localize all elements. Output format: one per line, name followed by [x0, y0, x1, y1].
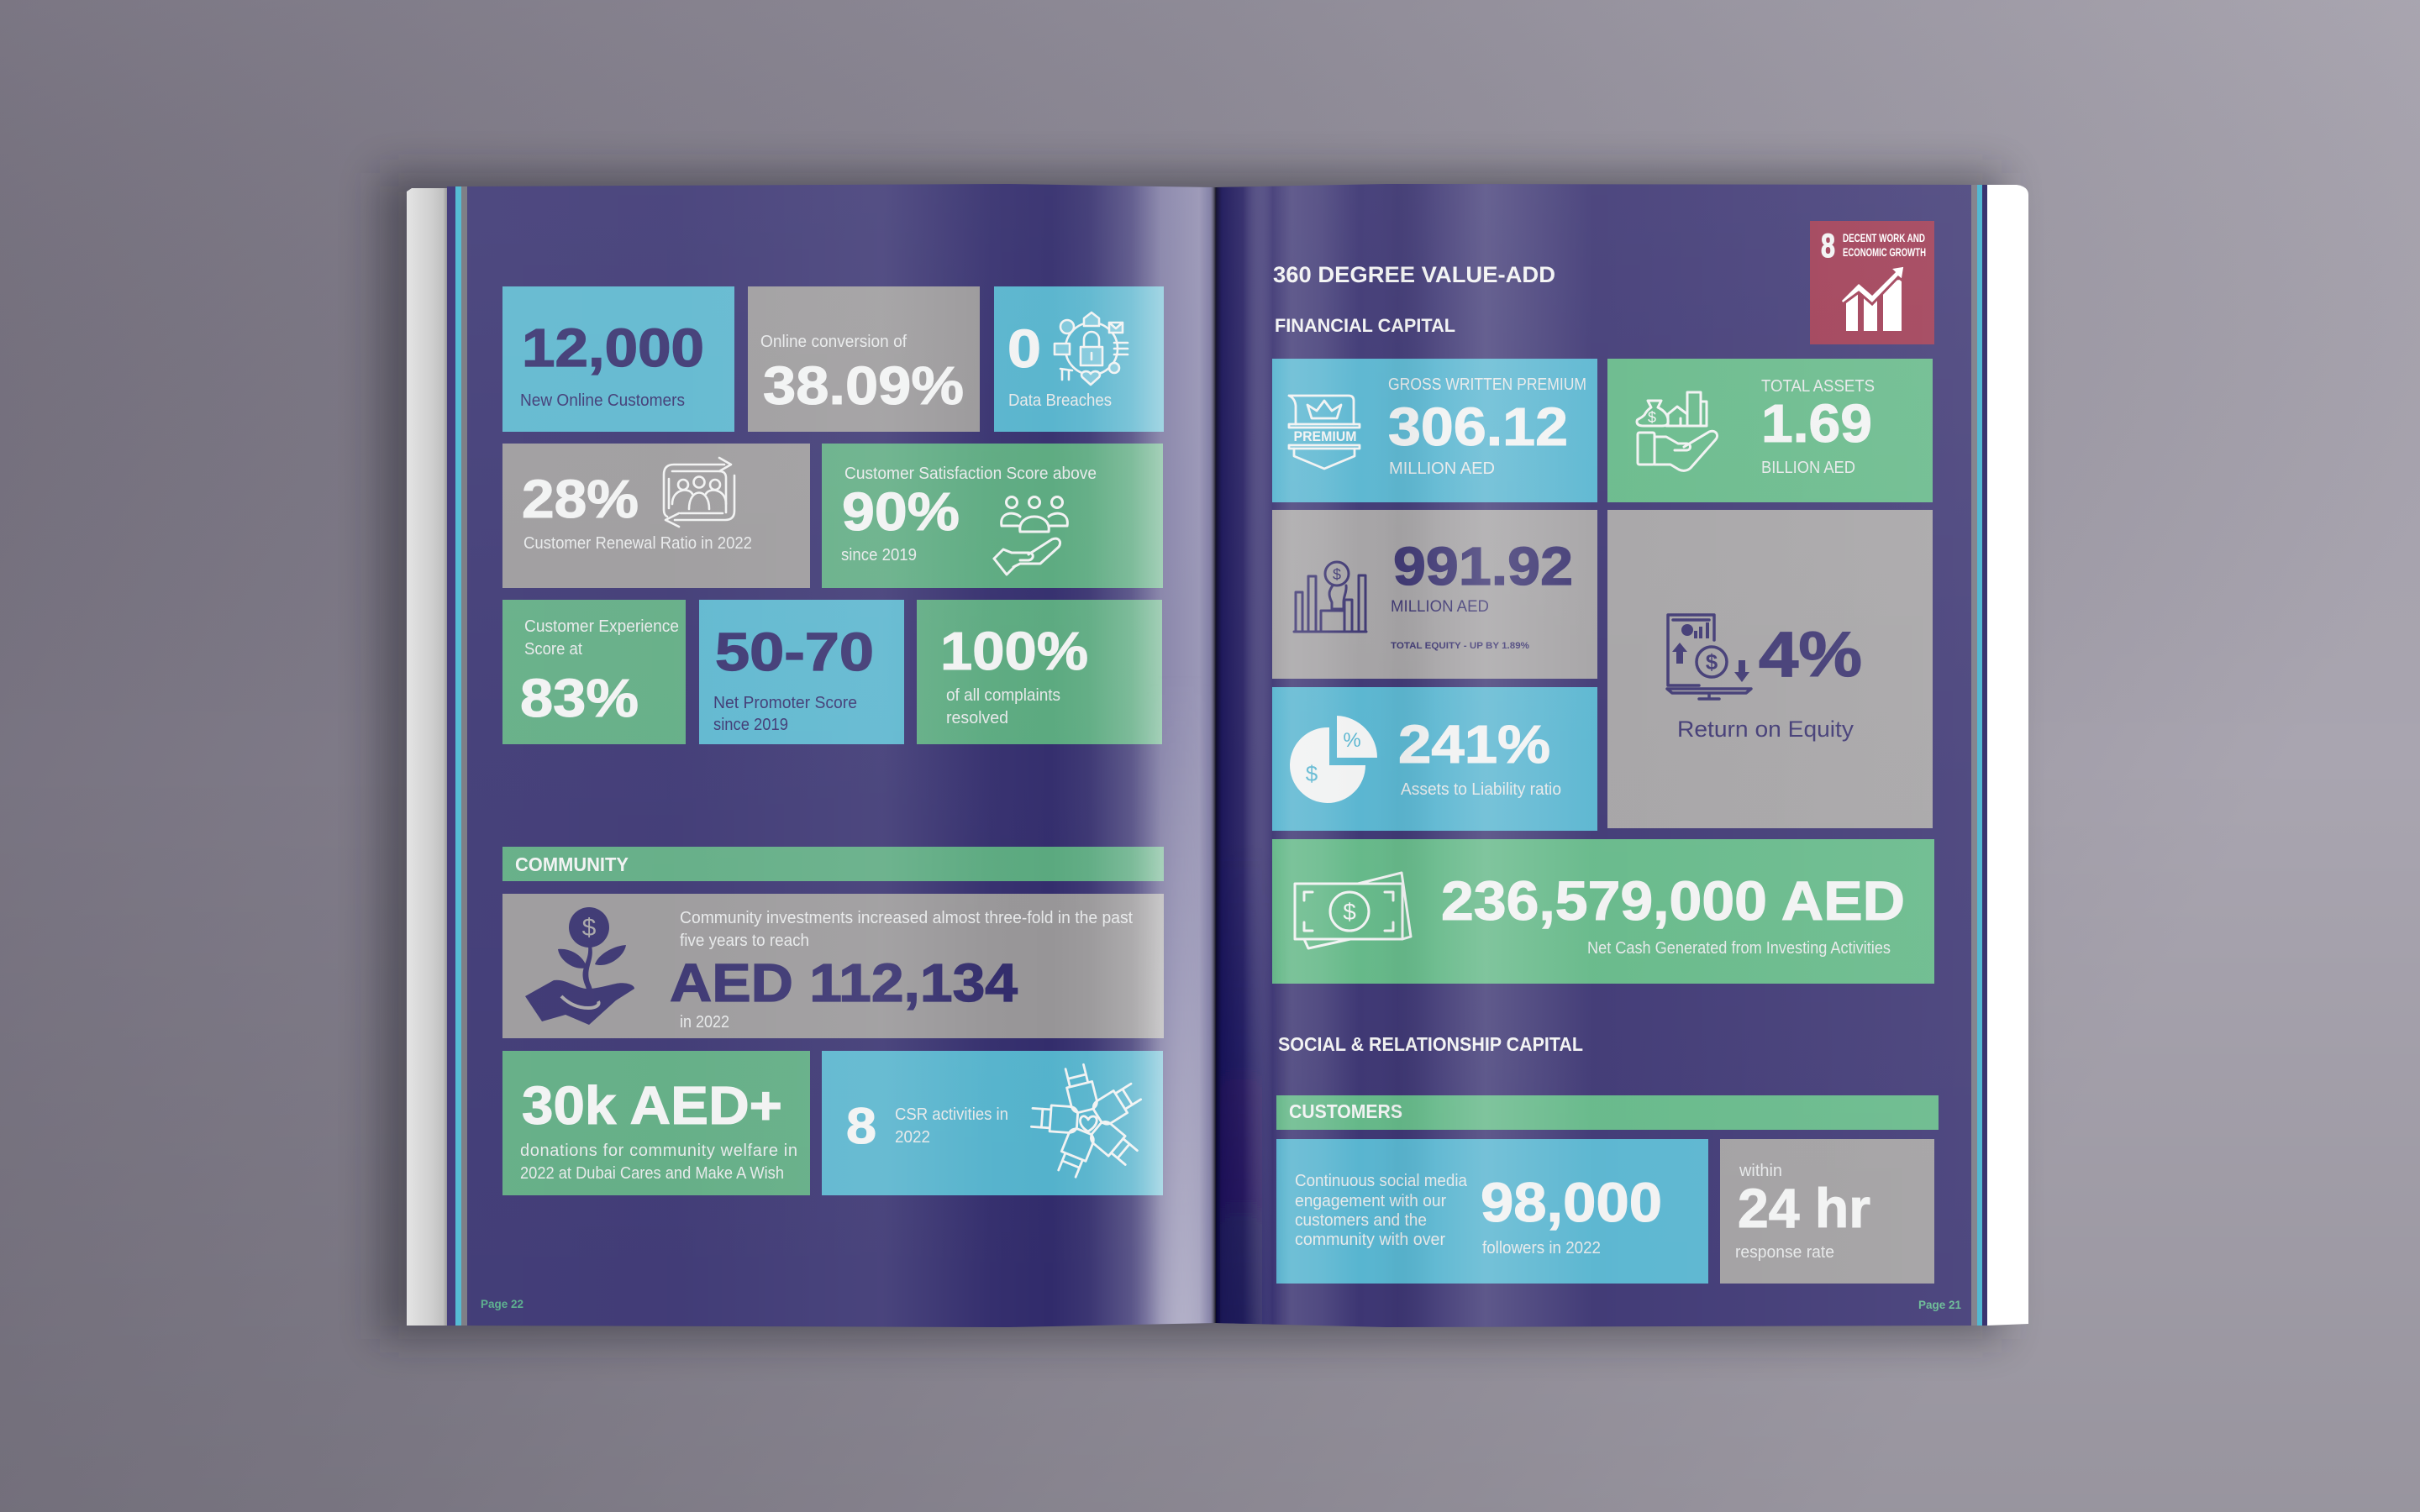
- panel: online conversion: Online conversion of: [760, 333, 907, 351]
- panel: net promoter score: since 2019: [713, 716, 788, 734]
- panel: 24 hr response rate: [1720, 1139, 1934, 1284]
- icon: people and caring hand: [994, 497, 1067, 575]
- panel: community investments: AED 112,134: [670, 953, 1018, 1013]
- panel: return on equity: 4%: [1759, 619, 1862, 690]
- panel: 12,000 new online customers: 12,000: [522, 318, 704, 378]
- icon: hand holding money plant: [525, 907, 634, 1025]
- panel: total assets: BILLION AED: [1761, 459, 1855, 477]
- panel: complaints resolved: 100%: [940, 621, 1088, 681]
- panel: return on equity: [1607, 510, 1933, 828]
- icon: five joined hands with heart: [1031, 1063, 1143, 1179]
- icon: bars with coin in hand: [1294, 562, 1366, 632]
- panel: 30k AED donations: 30k AED+: [522, 1075, 782, 1136]
- panel: customer experience score: Score at: [524, 640, 582, 659]
- panel: total equity: 991.92: [1393, 536, 1573, 596]
- heading: social and relationship capital: SOCIAL & RELATIONSHIP CAPITAL: [1278, 1033, 1583, 1055]
- panel: gross written premium: [1272, 359, 1597, 502]
- panel: community investments: Community investments increased almost three-fold in the past: [680, 909, 1133, 927]
- panel: customer satisfaction score: Customer Satisfaction Score above: [844, 465, 1097, 483]
- heading: financial capital: FINANCIAL CAPITAL: [1275, 315, 1455, 336]
- panel: total equity: [1272, 510, 1597, 679]
- heading bar: customers: [1276, 1095, 1939, 1130]
- panel: data breaches: [994, 286, 1164, 432]
- left page edge stack: [407, 186, 467, 1326]
- panel: social media followers: customers and the: [1295, 1211, 1427, 1230]
- panel: net promoter score: 50-70: [715, 622, 874, 682]
- panel: net cash generated: $: [1343, 899, 1356, 925]
- panel: total assets: 1.69: [1761, 393, 1872, 454]
- icon: report with coin and arrows: [1667, 615, 1751, 699]
- panel: social media followers: 98,000: [1481, 1171, 1662, 1233]
- badge: SDG 8 decent work: ECONOMIC GROWTH: [1843, 245, 1926, 259]
- panel: customer satisfaction score: since 2019: [841, 546, 917, 564]
- panel: CSR activities: 2022: [895, 1128, 930, 1147]
- panel: net promoter score: [699, 600, 904, 744]
- panel: 24 hr response rate: response rate: [1735, 1243, 1834, 1262]
- panel: total assets: TOTAL ASSETS: [1761, 377, 1875, 396]
- panel: customer renewal ratio: 28%: [522, 469, 639, 529]
- panel: community investments: [502, 894, 1164, 1038]
- panel: customer renewal ratio: [502, 444, 810, 588]
- panel: total equity: TOTAL EQUITY - UP BY 1.89%: [1391, 641, 1529, 651]
- panel: CSR activities: [822, 1051, 1163, 1195]
- panel: total assets: [1607, 359, 1933, 502]
- panel: net cash generated: Net Cash Generated from Investing Activities: [1587, 939, 1891, 958]
- panel: customer experience score: Customer Experience: [524, 617, 679, 636]
- panel: community investments: $: [582, 914, 597, 942]
- icon: padlock network: [1055, 312, 1128, 385]
- panel: 12,000 new online customers: [502, 286, 734, 432]
- panel: return on equity: $: [1706, 649, 1718, 675]
- panel: customer satisfaction score: 90%: [842, 481, 960, 542]
- panel: social media followers: community with over: [1295, 1231, 1445, 1249]
- panel: social media followers: [1276, 1139, 1708, 1284]
- panel: total assets: $: [1648, 409, 1656, 426]
- panel: 30k AED donations: 2022 at Dubai Cares and Make A Wish: [520, 1164, 784, 1183]
- panel: social media followers: Continuous social media: [1295, 1172, 1468, 1190]
- heading bar: customers: CUSTOMERS: [1289, 1100, 1402, 1122]
- panel: CSR activities: 8: [846, 1098, 876, 1154]
- panel: customer experience score: [502, 600, 686, 744]
- panel: 24 hr response rate: 24 hr: [1738, 1177, 1870, 1239]
- panel: 12,000 new online customers: New Online Customers: [520, 391, 685, 410]
- icon: growth chart: [1840, 265, 1905, 331]
- panel: gross written premium: 306.12: [1388, 396, 1568, 457]
- panel: complaints resolved: resolved: [946, 709, 1008, 727]
- panel: customer satisfaction score: [822, 444, 1163, 588]
- panel: community investments: in 2022: [680, 1013, 729, 1032]
- icon: hand with assets: [1637, 392, 1718, 470]
- icon: premium crown badge: PREMIUM: [1294, 428, 1356, 444]
- page lighting overlays: [467, 181, 1971, 1336]
- panel: 24 hr response rate: within: [1739, 1162, 1782, 1180]
- panel: assets to liability: [1272, 687, 1597, 831]
- panel: complaints resolved: [917, 600, 1162, 744]
- page number left: Page 22: [481, 1297, 523, 1310]
- panel: gross written premium: GROSS WRITTEN PREMIUM: [1388, 375, 1586, 394]
- panel: 30k AED donations: [502, 1051, 810, 1195]
- panel: total equity: MILLION AED: [1391, 598, 1489, 616]
- panel: assets to liability: 241%: [1398, 714, 1550, 774]
- panel: customer renewal ratio: Customer Renewal Ratio in 2022: [523, 534, 752, 553]
- panel: data breaches: 0: [1007, 318, 1041, 379]
- right page: [1216, 184, 1971, 1327]
- badge: SDG 8 decent work: [1810, 221, 1934, 344]
- panel: community investments: five years to reach: [680, 932, 809, 950]
- badge: SDG 8 decent work: 8: [1821, 228, 1835, 265]
- panel: online conversion: 38.09%: [763, 355, 964, 416]
- panel: assets to liability: $: [1306, 761, 1318, 786]
- left page: [467, 184, 1216, 1327]
- panel: social media followers: engagement with our: [1295, 1192, 1446, 1210]
- panel: 30k AED donations: donations for community welfare in: [520, 1142, 797, 1160]
- panel: social media followers: followers in 2022: [1482, 1239, 1601, 1257]
- panel: net cash generated: 236,579,000 AED: [1441, 869, 1905, 932]
- icon: renewal arrows with people: [664, 458, 734, 527]
- heading bar: community: [502, 847, 1164, 881]
- panel: gross written premium: MILLION AED: [1389, 459, 1495, 478]
- icon: premium crown badge: [1289, 396, 1360, 469]
- right page edge stack: [1971, 185, 2028, 1326]
- badge: SDG 8 decent work: DECENT WORK AND: [1843, 231, 1925, 244]
- panel: CSR activities: CSR activities in: [895, 1105, 1008, 1124]
- panel: net promoter score: Net Promoter Score: [713, 694, 857, 712]
- title: 360 DEGREE VALUE-ADD: [1273, 262, 1555, 287]
- panel: assets to liability: %: [1343, 729, 1361, 752]
- panel: online conversion: [748, 286, 980, 432]
- panel: net cash generated: [1272, 839, 1934, 984]
- icon: pie chart: [1290, 716, 1377, 803]
- panel: assets to liability: Assets to Liability ratio: [1401, 780, 1561, 799]
- panel: total equity: $: [1333, 566, 1341, 583]
- panel: data breaches: Data Breaches: [1008, 391, 1112, 410]
- page number right: Page 21: [1918, 1298, 1961, 1311]
- heading bar: community: COMMUNITY: [515, 853, 629, 875]
- panel: complaints resolved: of all complaints: [946, 686, 1060, 705]
- panel: return on equity: Return on Equity: [1677, 717, 1854, 742]
- panel: customer experience score: 83%: [520, 668, 639, 728]
- icon: banknotes: [1295, 873, 1411, 948]
